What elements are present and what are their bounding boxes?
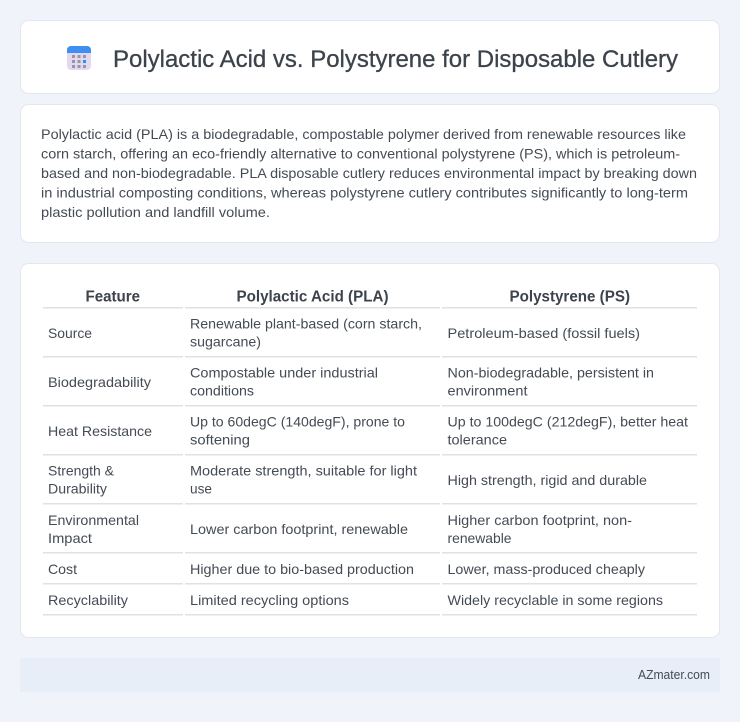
row: heat resistance [48, 414, 688, 448]
row: heat resistance: softening [190, 432, 250, 448]
row: cost [48, 561, 645, 577]
panel: header [20, 20, 720, 94]
table header row: Polystyrene (PS) [510, 288, 630, 306]
panel: introduction [20, 104, 720, 242]
title: Polylactic Acid vs. Polystyrene for Disposable Cutlery [113, 46, 678, 73]
row: source: Source [48, 325, 92, 341]
row: strength and durability: Strength & [48, 462, 115, 478]
row: biodegradability: Compostable under industrial [190, 364, 378, 380]
footer bar [20, 658, 720, 692]
row: strength and durability: Moderate strength, suitable for light [190, 462, 417, 478]
row: biodegradability: environment [448, 382, 528, 398]
row: environmental impact [48, 512, 632, 546]
row: cost: Cost [48, 561, 77, 577]
text block: introduction paragraph: Polylactic acid (PLA) is a biodegradable, compostable polymer derived from renewable resources like [41, 126, 686, 142]
row: environmental impact: renewable [448, 530, 512, 546]
row: biodegradability: conditions [190, 382, 254, 398]
row: strength and durability: High strength, rigid and durable [448, 472, 647, 488]
row: cost: Higher due to bio-based production [190, 561, 414, 577]
table header row: Polylactic Acid (PLA) [236, 288, 388, 306]
row: environmental impact: Impact [48, 530, 92, 546]
row: recyclability: Limited recycling options [190, 592, 349, 608]
text block: introduction paragraph [41, 126, 697, 220]
row: source [48, 316, 640, 350]
text block: introduction paragraph: in industrial composting conditions, whereas polystyrene cutlery contributes significantly to long-term [41, 184, 688, 200]
text block: introduction paragraph: plastic pollution and landfill volume. [41, 204, 270, 220]
row: strength and durability: use [190, 480, 212, 496]
row: heat resistance: Heat Resistance [48, 423, 152, 439]
text block: introduction paragraph: based and non-biodegradable. PLA disposable cutlery reduces environmental impact by breaking down [41, 165, 697, 181]
row: environmental impact: Lower carbon footprint, renewable [190, 521, 408, 537]
icon: calendar grid [67, 46, 91, 70]
row: heat resistance: tolerance [448, 432, 507, 448]
row: recyclability: Widely recyclable in some regions [448, 592, 663, 608]
table header row: Feature [86, 288, 140, 306]
row: recyclability: Recyclability [48, 592, 128, 608]
row: source: Petroleum-based (fossil fuels) [448, 325, 640, 341]
row: recyclability [48, 592, 663, 608]
row: source: sugarcane) [190, 334, 261, 350]
row: cost: Lower, mass-produced cheaply [448, 561, 645, 577]
text block: introduction paragraph: corn starch, offering an eco-friendly alternative to conventional polystyrene (PS), which is petroleum- [41, 146, 680, 162]
row: biodegradability: Non-biodegradable, persistent in [448, 364, 654, 380]
row: strength and durability: Durability [48, 480, 107, 496]
row: environmental impact: Higher carbon footprint, non- [448, 512, 632, 528]
table header row [86, 288, 630, 306]
row: heat resistance: Up to 100degC (212degF), better heat [448, 414, 688, 430]
footer source credit: AZmater.com [638, 668, 710, 682]
row: environmental impact: Environmental [48, 512, 139, 528]
row: heat resistance: Up to 60degC (140degF), prone to [190, 414, 405, 430]
row: strength and durability [48, 462, 647, 496]
panel: comparison table [20, 264, 720, 638]
row: biodegradability: Biodegradability [48, 374, 151, 390]
row: biodegradability [48, 364, 654, 398]
row: source: Renewable plant-based (corn starch, [190, 316, 422, 332]
